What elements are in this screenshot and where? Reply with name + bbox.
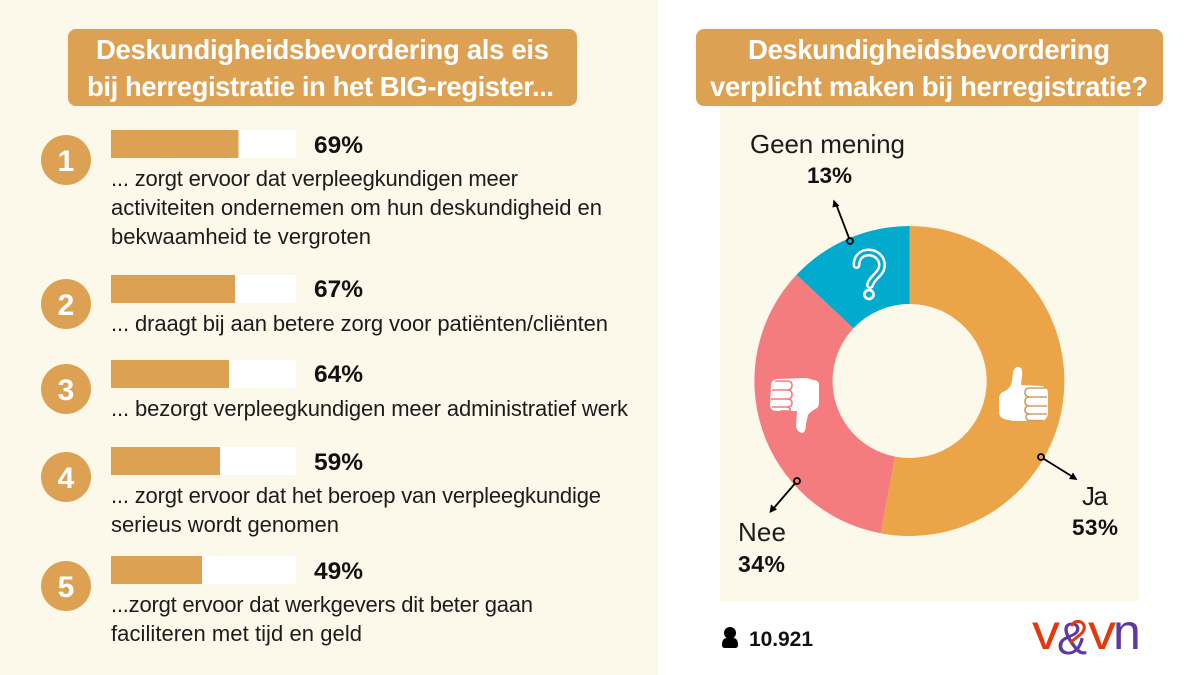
item 3: 64%	[314, 361, 363, 388]
item 5: 5	[58, 571, 74, 604]
heading: right title: Deskundigheidsbevordering	[748, 34, 1110, 65]
heading: left title	[68, 29, 577, 106]
label: Ja	[1072, 481, 1118, 540]
label: Geen mening: 13%	[807, 163, 852, 188]
item 2	[41, 275, 608, 336]
item 3	[41, 360, 629, 421]
item 4: 59%	[314, 449, 363, 476]
logo: V&VN	[1032, 604, 1141, 664]
label: Nee: 34%	[738, 551, 785, 577]
item 4	[41, 447, 601, 537]
item 2: 67%	[314, 276, 363, 303]
logo: V&VN: v	[1032, 604, 1060, 660]
panel: left background	[0, 0, 658, 675]
item 3: 3	[58, 374, 74, 407]
item 4: ... zorgt ervoor dat het beroep van verpleegkundige	[111, 483, 601, 508]
label: Geen mening	[750, 129, 905, 188]
logo: V&VN: v	[1088, 604, 1116, 660]
segment: Nee 34%	[754, 275, 895, 533]
heading: right title: verplicht maken bij herregistratie?	[710, 71, 1148, 102]
panel: donut background	[720, 100, 1139, 601]
item 1: 69%	[314, 132, 363, 159]
heading: right title	[696, 29, 1163, 106]
label: Geen mening: Geen mening	[750, 129, 905, 159]
logo: V&VN: n	[1113, 604, 1141, 660]
heading: left title: Deskundigheidsbevordering als eis	[96, 34, 549, 65]
arrow: Nee	[770, 478, 800, 513]
item 3: ... bezorgt verpleegkundigen meer administratief werk	[111, 396, 629, 421]
item 2: ... draagt bij aan betere zorg voor patiënten/cliënten	[111, 311, 608, 336]
item 4: 4	[58, 462, 75, 495]
donut chart	[754, 226, 1064, 536]
item 1: ... zorgt ervoor dat verpleegkundigen meer	[111, 166, 518, 191]
item 2: 2	[58, 289, 74, 322]
item 5: ...zorgt ervoor dat werkgevers dit beter gaan	[111, 592, 533, 617]
label: Ja: 53%	[1072, 515, 1118, 540]
icon: question mark	[856, 252, 882, 299]
segment: Geen mening 13%	[796, 226, 910, 328]
heading: left title: bij herregistratie in het BIG-register...	[87, 71, 554, 102]
item 1: bekwaamheid te vergroten	[111, 224, 371, 249]
item 5	[41, 556, 533, 646]
item 1: 1	[58, 145, 74, 178]
label: Nee: Nee	[738, 517, 786, 547]
label: Nee	[738, 517, 786, 577]
segment: Ja 53%	[881, 226, 1064, 536]
arrow: Geen mening	[832, 200, 853, 244]
icon: person	[722, 627, 738, 648]
item 5: faciliteren met tijd en geld	[111, 621, 362, 646]
item 4: serieus wordt genomen	[111, 512, 339, 537]
item 1	[41, 130, 602, 249]
item 1: activiteiten ondernemen om hun deskundigheid en	[111, 195, 602, 220]
respondent count: 10.921	[749, 628, 813, 651]
icon: thumbs up	[999, 367, 1048, 421]
icon: thumbs down	[770, 378, 819, 433]
item 5: 49%	[314, 558, 363, 585]
arrow: Ja	[1038, 454, 1078, 480]
logo: V&VN: &	[1057, 613, 1087, 664]
label: Ja: Ja	[1082, 481, 1109, 511]
